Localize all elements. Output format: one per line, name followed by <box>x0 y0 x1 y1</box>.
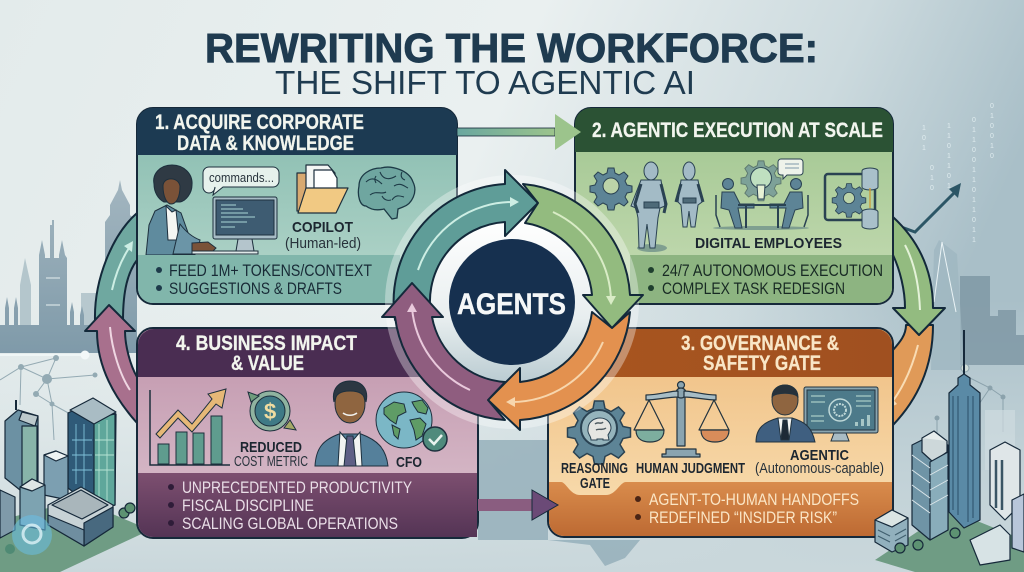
panel 2 title: 2. AGENTIC EXECUTION AT SCALE <box>592 119 883 142</box>
panel 3 bullets: REDEFINED “INSIDER RISK” <box>649 508 837 527</box>
arrow: step 4 to step 3 <box>478 440 558 520</box>
icon: meeting with gear and lightbulb <box>713 159 809 230</box>
title <box>205 25 818 101</box>
label: copilot: (Human-led) <box>285 235 361 252</box>
right skyline background: 1 <box>972 227 976 234</box>
icon: agentic person with monitor <box>756 385 878 442</box>
halo <box>385 175 639 429</box>
panel 2 bullets <box>630 255 892 303</box>
arrow: orange <box>488 312 630 430</box>
right skyline background: 1 <box>972 167 976 174</box>
subtitle: THE SHIFT TO AGENTIC AI <box>275 64 695 101</box>
right skyline background: 1 <box>947 123 951 130</box>
labels: governance: (Autonomous-capable) <box>755 460 884 477</box>
icon: man in suit <box>315 381 388 466</box>
panel 1 bullets: SUGGESTIONS & DRAFTS <box>169 279 342 298</box>
right skyline background: 0 <box>972 187 976 194</box>
panel 3 title: SAFETY GATE <box>703 352 821 375</box>
city: bottom right <box>875 330 1024 572</box>
labels: governance: REASONING <box>561 460 628 477</box>
city: bottom left <box>0 398 150 572</box>
icon: scales of justice <box>634 382 729 457</box>
right skyline background: 1 <box>922 145 926 152</box>
right skyline background: 1 <box>972 137 976 144</box>
panel 4 bullets: UNPRECEDENTED PRODUCTIVITY <box>182 478 412 497</box>
right skyline background: 0 <box>947 173 951 180</box>
labels: governance: AGENTIC <box>790 447 849 464</box>
map shape <box>478 440 640 566</box>
building overlapping panel 3 <box>875 510 908 553</box>
logo mark <box>5 515 52 555</box>
speech bubble: commands... <box>209 170 274 185</box>
panel 1: acquire corporate data and knowledge <box>137 108 457 304</box>
left outer cycle arrows <box>85 213 137 423</box>
left skyline background <box>0 180 137 440</box>
panel 4 bullets: FISCAL DISCIPLINE <box>182 496 314 515</box>
right skyline background: 0 <box>922 135 926 142</box>
panel 4 bullets: SCALING GLOBAL OPERATIONS <box>182 514 398 533</box>
hub label: AGENTS <box>457 288 566 321</box>
icon: woman at computer <box>146 165 277 255</box>
panel 2 bullets: COMPLEX TASK REDESIGN <box>662 279 845 298</box>
icon: growth chart <box>150 389 230 465</box>
panel 3 bullets <box>549 482 892 536</box>
labels: governance: GATE <box>580 475 610 492</box>
panel 4 title <box>176 332 357 375</box>
right skyline background: 1 <box>922 125 926 132</box>
inner flow lines <box>412 202 611 402</box>
central cycle diagram <box>382 170 643 430</box>
labels: cost metric and cfo: REDUCED <box>240 439 302 456</box>
label: copilot: COPILOT <box>292 219 353 236</box>
panel 4 title: & VALUE <box>231 352 304 375</box>
panel 4 header <box>138 329 477 377</box>
arrow: step 1 to step 2 <box>457 114 581 150</box>
labels: governance <box>561 447 884 492</box>
right skyline background: 1 <box>990 143 994 150</box>
panel 2 bullets: 24/7 AUTONOMOUS EXECUTION <box>662 261 883 280</box>
icon: folder <box>297 165 348 213</box>
label: copilot <box>285 219 361 252</box>
panel 1 bullets: FEED 1M+ TOKENS/CONTEXT <box>169 261 372 280</box>
right skyline background <box>922 103 1024 450</box>
right skyline background: 0 <box>990 153 994 160</box>
arrow: green <box>523 184 643 328</box>
right skyline background: 0 <box>990 123 994 130</box>
panel 1 title: DATA & KNOWLEDGE <box>177 132 354 155</box>
center hub <box>449 239 575 365</box>
right skyline background: 1 <box>972 237 976 244</box>
right skyline background: 0 <box>930 165 934 172</box>
right skyline background: 1 <box>990 113 994 120</box>
panel 3: governance and safety gate <box>548 328 893 537</box>
right outer cycle arrows <box>885 217 945 425</box>
labels: cost metric and cfo: CFO <box>396 454 422 471</box>
panel 3 title <box>681 332 839 375</box>
right skyline background: 0 <box>972 217 976 224</box>
trend arrow <box>893 183 961 232</box>
right skyline background: 0 <box>972 157 976 164</box>
icon: reasoning gear <box>568 401 630 464</box>
panel 3 header <box>549 329 892 377</box>
arrow: purple <box>382 283 505 420</box>
panel 4 title: 4. BUSINESS IMPACT <box>176 332 357 355</box>
right skyline background: 1 <box>947 163 951 170</box>
panel 4 bullets <box>138 473 477 537</box>
icon: robots <box>631 162 703 252</box>
right skyline background: 1 <box>972 207 976 214</box>
labels: governance: HUMAN JUDGMENT <box>636 460 745 477</box>
panel 4: business impact and value <box>137 328 478 538</box>
labels: cost metric and cfo: COST METRIC <box>234 453 308 470</box>
panel 1 header <box>137 108 457 155</box>
right skyline background: 1 <box>972 177 976 184</box>
icon: dollar cost cycle <box>248 391 296 431</box>
title: REWRITING THE WORKFORCE: <box>205 25 818 71</box>
right skyline background: 1 <box>947 133 951 140</box>
panel 2 header <box>575 108 893 152</box>
center background ring <box>430 220 594 384</box>
arrow: teal <box>394 170 538 320</box>
panel 3 bullets: AGENT-TO-HUMAN HANDOFFS <box>649 490 859 509</box>
panel 1 bullets <box>138 255 400 303</box>
panel 1 title: 1. ACQUIRE CORPORATE <box>155 111 364 134</box>
labels: cost metric and cfo <box>234 439 422 471</box>
right skyline background: 0 <box>972 147 976 154</box>
icon: dollar cost cycle: $ <box>264 399 276 424</box>
label: digital employees: DIGITAL EMPLOYEES <box>695 235 842 252</box>
icon: gear <box>590 168 632 210</box>
panel 1 title <box>155 111 364 155</box>
right skyline background: 0 <box>990 103 994 110</box>
icon: data process <box>825 168 878 229</box>
right skyline background: 1 <box>947 153 951 160</box>
panel 3 title: 3. GOVERNANCE & <box>681 332 839 355</box>
right skyline background: 1 <box>972 127 976 134</box>
icon: brain <box>358 167 415 219</box>
right skyline background: 1 <box>947 183 951 190</box>
right skyline background: 0 <box>972 117 976 124</box>
right skyline background: 0 <box>930 185 934 192</box>
right skyline background: 1 <box>972 197 976 204</box>
icon: globe with check <box>376 392 447 451</box>
right skyline background: 1 <box>930 175 934 182</box>
right skyline background: 0 <box>990 133 994 140</box>
speech bubble <box>203 167 279 195</box>
panel 2: agentic execution at scale <box>575 108 893 304</box>
right skyline background: 0 <box>947 143 951 150</box>
